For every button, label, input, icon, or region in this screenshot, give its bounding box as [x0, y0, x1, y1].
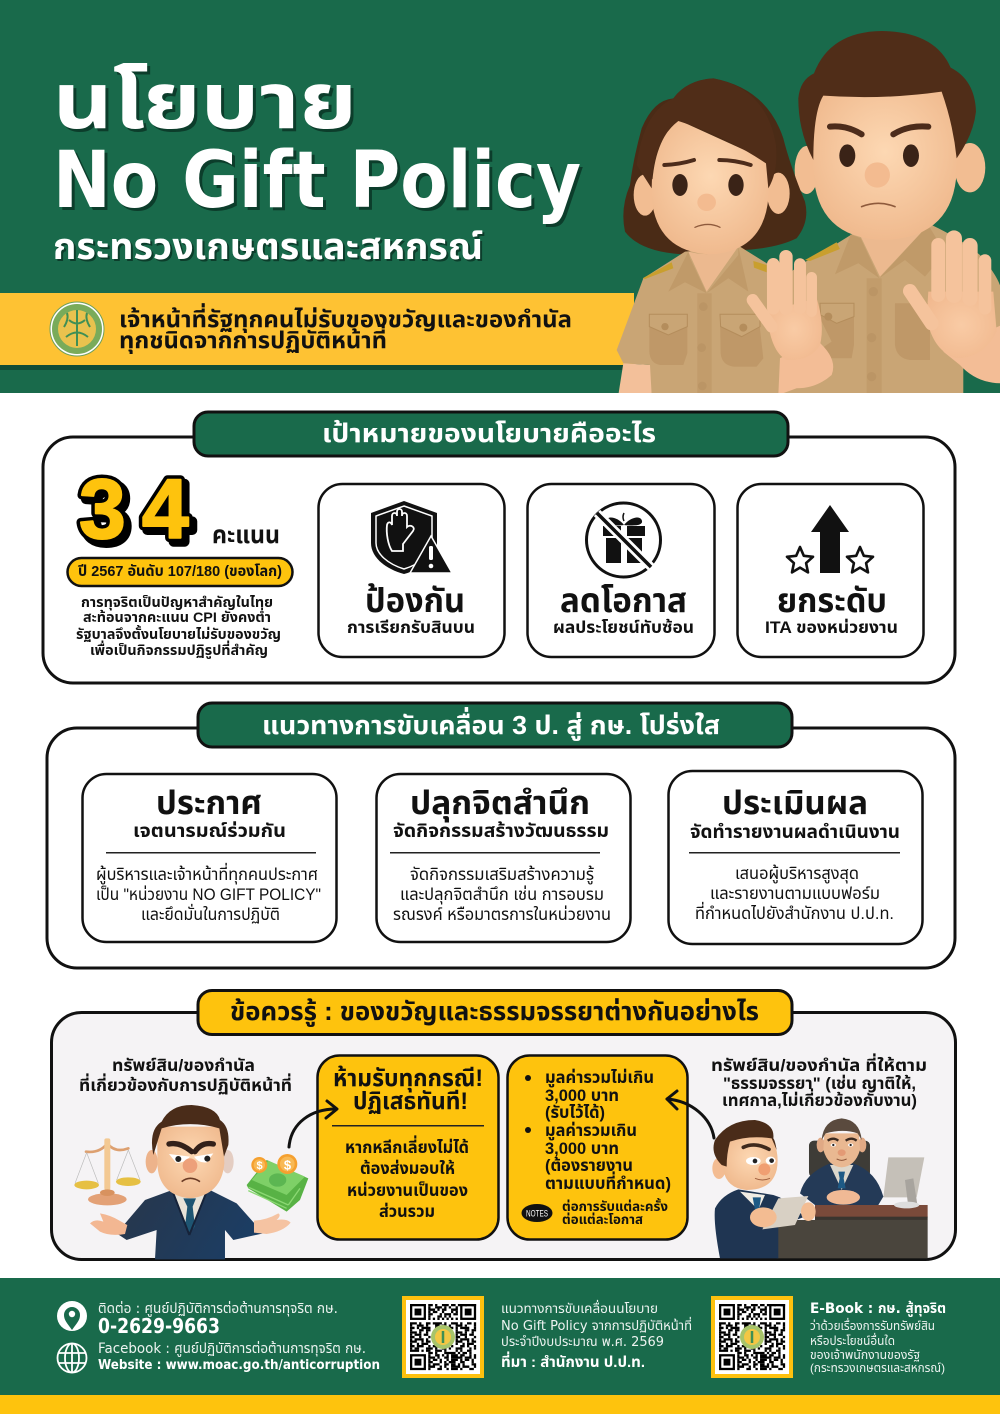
card text: ITA ของหน่วยงาน: [765, 617, 898, 637]
chair: [809, 1141, 870, 1177]
card: announce: [82, 774, 336, 942]
monitor: [883, 1157, 924, 1197]
title: Thai line: นโยบาย: [53, 57, 357, 145]
subtitle: ministry: กระทรวงเกษตรและสหกรณ์: [53, 226, 483, 267]
icon: no gift: [586, 503, 660, 577]
card: awareness: รณรงค์ หรือมาตรการในหน่วยงาน: [393, 905, 611, 924]
CPI explanation: สะท้อนจากคะแนน CPI ยังคงต่ำ: [83, 607, 271, 625]
card text: [347, 582, 475, 637]
CPI explanation: [76, 594, 281, 660]
contact text: Website : www.moac.go.th/anticorruption: [98, 1357, 380, 1373]
card text: ลดโอกาส: [560, 582, 687, 620]
card: evaluate: เสนอผู้บริหารสูงสุด: [735, 863, 859, 885]
woman back hair: [623, 78, 806, 254]
card: evaluate: [668, 771, 922, 944]
icon: notes badge: NOTES: [526, 1208, 548, 1218]
e-book text: ของเจ้าพนักงานของรัฐ: [810, 1348, 920, 1362]
icon: ministry seal: [50, 302, 104, 356]
yellow statement band: [0, 293, 640, 370]
header banner: [0, 0, 1000, 395]
man hand: [910, 238, 1000, 383]
card: announce: เจตนารมณ์ร่วมกัน: [133, 820, 286, 842]
card: value limits: 3,000 บาท: [545, 1139, 619, 1158]
label: ethical gifts: ทรัพย์สิน/ของกำนัล ที่ให้ตาม: [711, 1053, 927, 1075]
e-book text: [810, 1301, 946, 1375]
source text: ประจำปีงบประมาณ พ.ศ. 2569: [501, 1335, 664, 1350]
man head: [794, 146, 816, 194]
illustration: money and coins: [247, 1154, 308, 1212]
card: raise ITA: [738, 484, 924, 657]
e-book text: (กระทรวงเกษตรและสหกรณ์): [810, 1361, 945, 1375]
heading: gifts vs ethics: ข้อควรรู้ : ของขวัญและธรรมจรรยาต่างกันอย่างไร: [230, 996, 759, 1027]
card: prevent: [318, 484, 504, 657]
illustration: two officials raising hands: [617, 31, 1000, 395]
card: awareness: และปลุกจิตสำนึก เช่น การอบรม: [400, 885, 604, 905]
illustration: scales: [74, 1138, 141, 1205]
illustration: money and coins: $: [256, 1160, 263, 1172]
card text: ป้องกัน: [365, 582, 465, 620]
card text: ยกระดับ: [777, 582, 887, 620]
card: awareness: จัดกิจกรรมเสริมสร้างความรู้: [410, 864, 595, 886]
icon: location pin: [57, 1301, 87, 1331]
e-book text: E-Book : กษ. สู้ทุจริต: [810, 1301, 946, 1318]
label: duty-related gifts: [79, 1056, 292, 1095]
illustration: angry officer: [90, 1105, 291, 1259]
card: value limits: ต่อแต่ละโอกาส: [562, 1212, 643, 1227]
card: awareness: ปลุกจิตสำนึก: [410, 784, 590, 823]
score number 34: 34: [83, 466, 193, 560]
statement text: [119, 303, 572, 354]
heading: goals: เป้าหมายของนโยบายคืออะไร: [322, 418, 656, 448]
contact text: [98, 1300, 380, 1373]
illustration: money and coins: $: [284, 1158, 292, 1172]
panel: 3P approach: [47, 703, 955, 968]
card: value limits: [508, 1056, 688, 1240]
card: prohibited: ห้ามรับทุกกรณี!: [333, 1064, 483, 1093]
panel: goals: [43, 412, 955, 683]
icon: notes badge: [522, 1204, 552, 1222]
icon: arrow up with stars: [787, 505, 873, 573]
label: ethical gifts: [711, 1053, 927, 1110]
card: announce: เป็น "หน่วยงาน NO GIFT POLICY": [96, 885, 321, 904]
man body: [780, 225, 1000, 395]
card: value limits: (รับไว้ได้): [545, 1103, 605, 1122]
heading: goals: [194, 412, 788, 456]
source text: [501, 1299, 692, 1371]
card: prohibited: ปฏิเสธทันที!: [353, 1088, 468, 1115]
card: prohibited: หน่วยงานเป็นของ: [347, 1180, 468, 1200]
woman body: [618, 363, 652, 395]
card: awareness: [376, 774, 630, 942]
icon: shield with hand and warning: [371, 501, 452, 574]
card text: ผลประโยชน์ทับซ้อน: [553, 618, 694, 637]
boss: [800, 1163, 883, 1205]
contact text: 0-2629-9663: [98, 1314, 220, 1338]
desk: [777, 1220, 928, 1258]
e-book text: หรือประโยชน์อื่นใด: [810, 1332, 895, 1348]
label: ethical gifts: เทศกาล,ไม่เกี่ยวข้องกับงาน): [722, 1088, 917, 1110]
source text: No Gift Policy จากการปฏิบัติหน้าที่: [501, 1316, 692, 1334]
rank pill: [68, 558, 292, 586]
source text: แนวทางการขับเคลื่อนนโยบาย: [501, 1299, 658, 1317]
card text: [765, 582, 898, 637]
contact text: Facebook : ศูนย์ปฏิบัติการต่อต้านการทุจริต กษ.: [98, 1340, 366, 1357]
card: announce: ประกาศ: [156, 784, 262, 821]
woman hand: [753, 257, 833, 395]
card: value limits: มูลค่ารวมไม่เกิน: [545, 1067, 654, 1088]
card: reduce opportunity: [528, 484, 714, 657]
footer: [0, 1278, 1000, 1414]
panel: gifts and ethics: [52, 990, 956, 1260]
rank pill: ปี 2567 อันดับ 107/180 (ของโลก): [78, 563, 282, 580]
heading: approach: แนวทางการขับเคลื่อน 3 ป. สู่ กษ. โปร่งใส: [262, 707, 720, 741]
card text: [553, 582, 694, 637]
card: prohibited: [318, 1056, 498, 1240]
officer: [715, 1189, 805, 1258]
contact text: ติดต่อ : ศูนย์ปฏิบัติการต่อต้านการทุจริต กษ.: [98, 1300, 338, 1317]
card: value limits: (ต้องรายงาน: [545, 1156, 633, 1175]
title: No Gift Policy: No Gift Policy: [53, 136, 581, 226]
score unit: คะแนน: [212, 521, 280, 549]
card: evaluate: และรายงานตามแบบฟอร์ม: [710, 884, 880, 903]
card: value limits: ตามแบบที่กำหนด): [545, 1171, 671, 1193]
card: evaluate: ประเมินผล: [722, 784, 868, 821]
heading: gifts vs ethics: [198, 990, 792, 1034]
label: duty-related gifts: ทรัพย์สิน/ของกำนัล: [112, 1056, 255, 1075]
qr code: policy: [402, 1296, 484, 1378]
card: evaluate: จัดทำรายงานผลดำเนินงาน: [690, 822, 900, 843]
CPI explanation: เพื่อเป็นกิจกรรมปฏิรูปที่สำคัญ: [90, 640, 268, 660]
qr code: e-book: [711, 1296, 793, 1378]
woman head: [634, 174, 654, 216]
card: value limits: 3,000 บาท: [545, 1086, 619, 1105]
heading: approach: [198, 703, 792, 747]
CPI explanation: รัฐบาลจึงตั้งนโยบายไม่รับของขวัญ: [76, 624, 281, 642]
card: announce: และยึดมั่นในการปฏิบัติ: [141, 903, 280, 924]
label: ethical gifts: "ธรรมจรรยา" (เช่น ญาติให้,: [723, 1073, 916, 1093]
icon: globe: [58, 1344, 86, 1372]
illustration: officer reporting to boss: [712, 1118, 928, 1258]
CPI score block: [68, 462, 292, 660]
arrow: from ethics to limits: [667, 1091, 714, 1138]
statement text: เจ้าหน้าที่รัฐทุกคนไม่รับของขวัญและของกำนัล: [119, 303, 572, 333]
arrow: to prohibition card: [289, 1101, 337, 1147]
source text: ที่มา : สำนักงาน ป.ป.ท.: [501, 1351, 645, 1371]
label: duty-related gifts: ที่เกี่ยวข้องกับการปฏิบัติหน้าที่: [79, 1073, 292, 1095]
card: prohibited: ต้องส่งมอบให้: [360, 1158, 455, 1178]
card: announce: ผู้บริหารและเจ้าหน้าที่ทุกคนประกาศ: [96, 862, 318, 886]
card: prohibited: ส่วนรวม: [379, 1201, 435, 1221]
CPI explanation: การทุจริตเป็นปัญหาสำคัญในไทย: [81, 594, 273, 611]
score number 34: 34: [79, 462, 189, 556]
card text: การเรียกรับสินบน: [347, 618, 475, 637]
e-book text: ว่าด้วยเรื่องการรับทรัพย์สิน: [810, 1317, 935, 1333]
statement text: ทุกชนิดจากการปฏิบัติหน้าที่: [119, 324, 387, 354]
card: value limits: ต่อการรับแต่ละครั้ง: [562, 1197, 668, 1214]
card: prohibited: หากหลีกเลี่ยงไม่ได้: [345, 1135, 469, 1157]
card: value limits: มูลค่ารวมเกิน: [545, 1120, 637, 1141]
card: awareness: จัดกิจกรรมสร้างวัฒนธรรม: [393, 820, 609, 842]
score number 34: 34: [79, 462, 189, 556]
card: evaluate: ที่กำหนดไปยังสำนักงาน ป.ป.ท.: [695, 901, 894, 923]
